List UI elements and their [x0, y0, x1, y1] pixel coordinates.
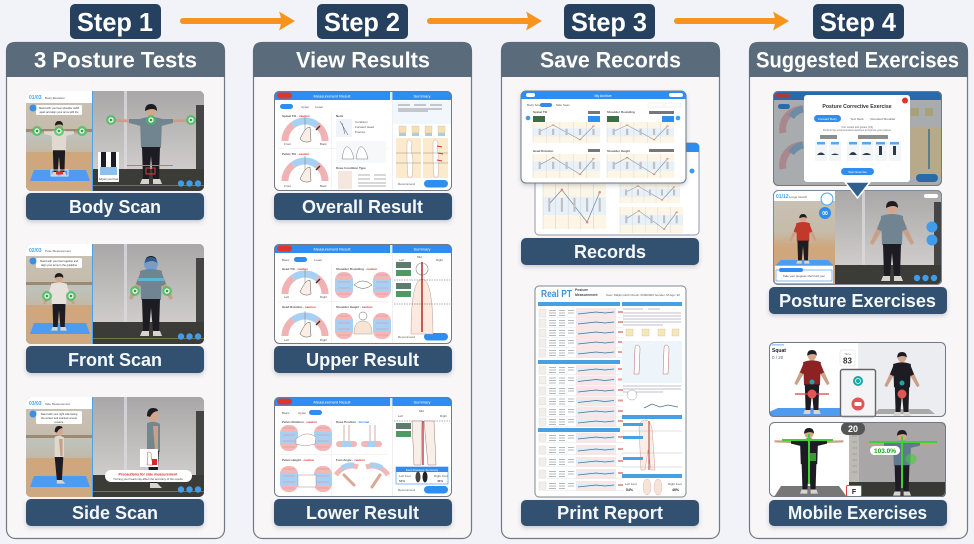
screenshot: overall result: Pelvic Tilt · caution	[282, 152, 309, 156]
screenshot: print report page: 54%	[626, 488, 634, 492]
label: Upper Result: Upper Result	[306, 350, 419, 370]
screenshot: overall result: Forward Head	[355, 125, 374, 129]
screenshot: upper result: Basic	[282, 258, 290, 262]
screenshot: side scan: Side Measurement	[45, 402, 70, 406]
step badge: Step 1: Step 1	[77, 7, 153, 37]
screenshot: lower result: Left	[398, 414, 403, 418]
panel: Save Records	[501, 42, 720, 538]
panel heading: Save Records	[501, 42, 720, 77]
screenshot: overall result: Condition	[355, 120, 368, 124]
screenshot: lower result: Pelvis Rotation · caution	[282, 420, 317, 424]
popup: Posture Corrective Exercise: Start Exercise	[848, 170, 867, 174]
screenshot: overall result: Back	[320, 184, 327, 188]
screenshot: overall result: Lower	[315, 105, 323, 109]
label: Front Scan	[26, 346, 204, 373]
label: Mobile Exercises	[769, 500, 947, 526]
step badge: Step 3: Step 3	[571, 7, 647, 37]
screenshot: upper result: Left	[284, 338, 289, 342]
screenshot: overall result	[274, 91, 452, 191]
screenshot: body scan: 01/03	[29, 95, 42, 101]
screenshot: mobile squat exercise: Time	[844, 352, 851, 356]
screenshot: upper result: Right	[320, 338, 327, 342]
label: Records	[521, 238, 699, 265]
arrow: step 2 to step 3	[430, 12, 542, 30]
screenshot: side scan: posture	[55, 420, 64, 424]
screenshot: upper result: Shoulder Height · caution	[336, 305, 373, 309]
label: Records: Records	[574, 242, 646, 262]
label: Posture Exercises: Posture Exercises	[779, 291, 936, 311]
panel heading: Suggested Exercises	[749, 42, 968, 77]
screenshot: mobile squat exercise	[769, 342, 946, 417]
popup: Posture Corrective Exercise: Your results and guides (1/3)	[841, 126, 873, 129]
screenshot: side scan: 03/03	[29, 401, 42, 407]
screenshot: front scan: Pose Measurement	[45, 249, 71, 253]
panel heading: View Results	[253, 42, 472, 77]
label: Overall Result: Overall Result	[302, 197, 423, 217]
screenshot: print report page: Real PT	[541, 288, 572, 300]
screenshot: mobile balance exercise	[769, 422, 946, 497]
screenshot: lower result: Mid	[419, 409, 424, 413]
label: Overall Result	[274, 193, 452, 220]
screenshot: print report page: 46%	[672, 488, 680, 492]
label: Upper Result	[274, 346, 452, 373]
arrow: step 1 to step 2	[183, 12, 295, 30]
screenshot: body scan: Adjust your feet	[99, 177, 118, 181]
label: Body Scan	[26, 193, 204, 220]
label: Mobile Exercises: Mobile Exercises	[788, 503, 927, 523]
screenshot: side scan: Precautions for side measurement	[119, 472, 178, 476]
arrow: step 3 to step 4	[677, 12, 789, 30]
screenshot: front records page: Body Scan	[527, 103, 542, 107]
panel heading: View Results: View Results	[296, 48, 430, 72]
screenshot: print report page: Measurement	[575, 293, 598, 297]
screenshot: mobile squat exercise: 83	[843, 356, 852, 366]
label: Lower Result: Lower Result	[306, 503, 419, 523]
screenshot: side scan: Turning your head may affect the accuracy of the results	[113, 477, 183, 481]
screenshot: print report page: Left Foot	[625, 482, 637, 486]
popup: Posture Corrective Exercise: Rounded Shoulder	[870, 117, 896, 121]
screenshot: posture exercise video: Take your progress shot hold your	[783, 274, 825, 278]
screenshot: mobile balance exercise: 20	[848, 424, 858, 434]
screenshot: upper result: Right	[320, 295, 327, 299]
screenshot: lower result: Basic	[282, 411, 290, 415]
screenshot: print report page: User: Mdjkmn123 Check: 00000000 Gender: M Age: 32	[606, 293, 680, 297]
screenshot: posture exercise video: 00	[822, 211, 828, 217]
screenshot: lower result: Upper	[298, 411, 306, 415]
popup: Posture Corrective Exercise	[804, 95, 910, 182]
screenshot: front records page: My Archive	[594, 94, 612, 98]
panel heading: Save Records: Save Records	[540, 48, 681, 72]
panel: View Results	[253, 42, 472, 538]
screenshot: body scan: Stand with your feet shoulder width	[39, 106, 80, 110]
screenshot: front records page: Shoulder Rounding	[607, 110, 635, 114]
screenshot: upper result: Right	[436, 258, 443, 262]
screenshot: overall result: Neck	[336, 114, 344, 118]
popup: Posture Corrective Exercise: Forward Body	[818, 117, 837, 121]
screenshot: back records page	[535, 143, 699, 235]
panel: 3 Posture Tests	[6, 42, 225, 538]
screenshot: upper result: Mid	[417, 255, 422, 259]
screenshot: mobile squat exercise: 0 / 20	[772, 355, 784, 360]
screenshot: upper result	[274, 244, 452, 344]
screenshot: lower result: Foot Pressure Summary	[406, 468, 439, 472]
screenshot: body scan	[26, 91, 204, 191]
label: Lower Result	[274, 499, 452, 526]
screenshot: print report page	[535, 286, 686, 497]
screenshot: overall result: Front	[284, 142, 291, 146]
screenshot: front scan: 02/03	[29, 248, 42, 254]
screenshot: front scan: align your arms to the guideline	[41, 263, 78, 267]
screenshot: front scan	[26, 244, 204, 344]
screenshot: side scan	[26, 397, 204, 497]
screenshot: upper result: Head Rotation · caution	[282, 305, 316, 309]
screenshot: upper result: Shoulder Rounding · caution	[336, 267, 377, 271]
screenshot: lower result	[274, 397, 452, 497]
screenshot: print report page: Right Foot	[668, 482, 682, 486]
label: Side Scan	[26, 499, 204, 526]
screenshot: lower result: Right Foot	[434, 474, 448, 478]
screenshot: overall result: Knee Condition Type	[336, 166, 366, 170]
panel heading: 3 Posture Tests: 3 Posture Tests	[34, 48, 197, 72]
screenshot: posture exercise video: 01/12	[776, 194, 789, 200]
screenshot: upper result: Left	[399, 258, 404, 262]
screenshot: overall result: Front	[284, 184, 291, 188]
popup: Posture Corrective Exercise: Text Neck	[850, 117, 864, 121]
screenshot: dimmed result page	[773, 91, 942, 186]
screenshot: mobile balance exercise: F	[852, 489, 857, 496]
screenshot: mobile squat exercise: Squat	[772, 348, 786, 354]
screenshot: front scan: Stand with your feet together and	[40, 259, 79, 263]
screenshot: side scan: Stand with your right side facing	[41, 412, 78, 416]
screenshot: upper result: Head Tilt · caution	[282, 267, 308, 271]
screenshot: body scan: apart and align your arms with the	[39, 110, 79, 114]
arrow: popup to exercise video	[845, 182, 870, 198]
label: Print Report	[521, 500, 699, 526]
step badge: Step 2: Step 2	[324, 7, 400, 37]
screenshot: front records page: Shoulder Height	[607, 149, 630, 153]
screenshot: upper result: Lower	[314, 258, 322, 262]
screenshot: lower result: 46%	[437, 479, 443, 483]
screenshot: body scan: Body Elevation	[45, 96, 65, 100]
screenshot: lower result: Right	[440, 414, 447, 418]
label: Side Scan: Side Scan	[72, 503, 158, 523]
screenshot: front records page	[521, 91, 686, 183]
screenshot: upper result: Left	[284, 295, 289, 299]
label: Body Scan: Body Scan	[69, 197, 161, 217]
screenshot: side scan: the screen and maintain a level	[41, 416, 77, 420]
screenshot: overall result: Spinal Tilt · caution	[282, 114, 310, 118]
label: Print Report: Print Report	[557, 503, 663, 523]
screenshot: overall result: Posture	[355, 130, 366, 134]
screenshot: overall result: Back	[320, 142, 327, 146]
label: Posture Exercises	[769, 287, 947, 314]
screenshot: lower result: Pelvic Height · caution	[282, 458, 314, 462]
screenshot: print report page: Posture	[575, 288, 588, 292]
screenshot: overall result: Upper	[301, 105, 309, 109]
screenshot: posture exercise video	[773, 190, 942, 285]
popup: Posture Corrective Exercise: Posture Corrective Exercise	[822, 104, 892, 110]
panel: Suggested Exercises	[749, 42, 968, 538]
screenshot: lower result: Foot Angle · caution	[336, 458, 365, 462]
screenshot: posture exercise video: Lunge stretch	[789, 195, 808, 199]
panel heading: Suggested Exercises: Suggested Exercises	[756, 48, 959, 72]
panel heading: 3 Posture Tests	[6, 42, 225, 77]
step badge: Step 4: Step 4	[820, 7, 897, 37]
screenshot: mobile balance exercise: 103.0%	[874, 448, 896, 455]
screenshot: front records page: Spinal Tilt	[533, 110, 547, 114]
popup: Posture Corrective Exercise: Perform the recommended exercises to improve your posture	[823, 129, 892, 132]
screenshot: lower result: Knee Position · Normal	[336, 420, 369, 424]
screenshot: front records page: Head Rotation	[533, 149, 554, 153]
screenshot: lower result: Left Foot	[399, 474, 411, 478]
screenshot: lower result: 54%	[399, 479, 405, 483]
label: Front Scan: Front Scan	[68, 350, 162, 370]
screenshot: front records page: Side Scan	[556, 103, 570, 107]
